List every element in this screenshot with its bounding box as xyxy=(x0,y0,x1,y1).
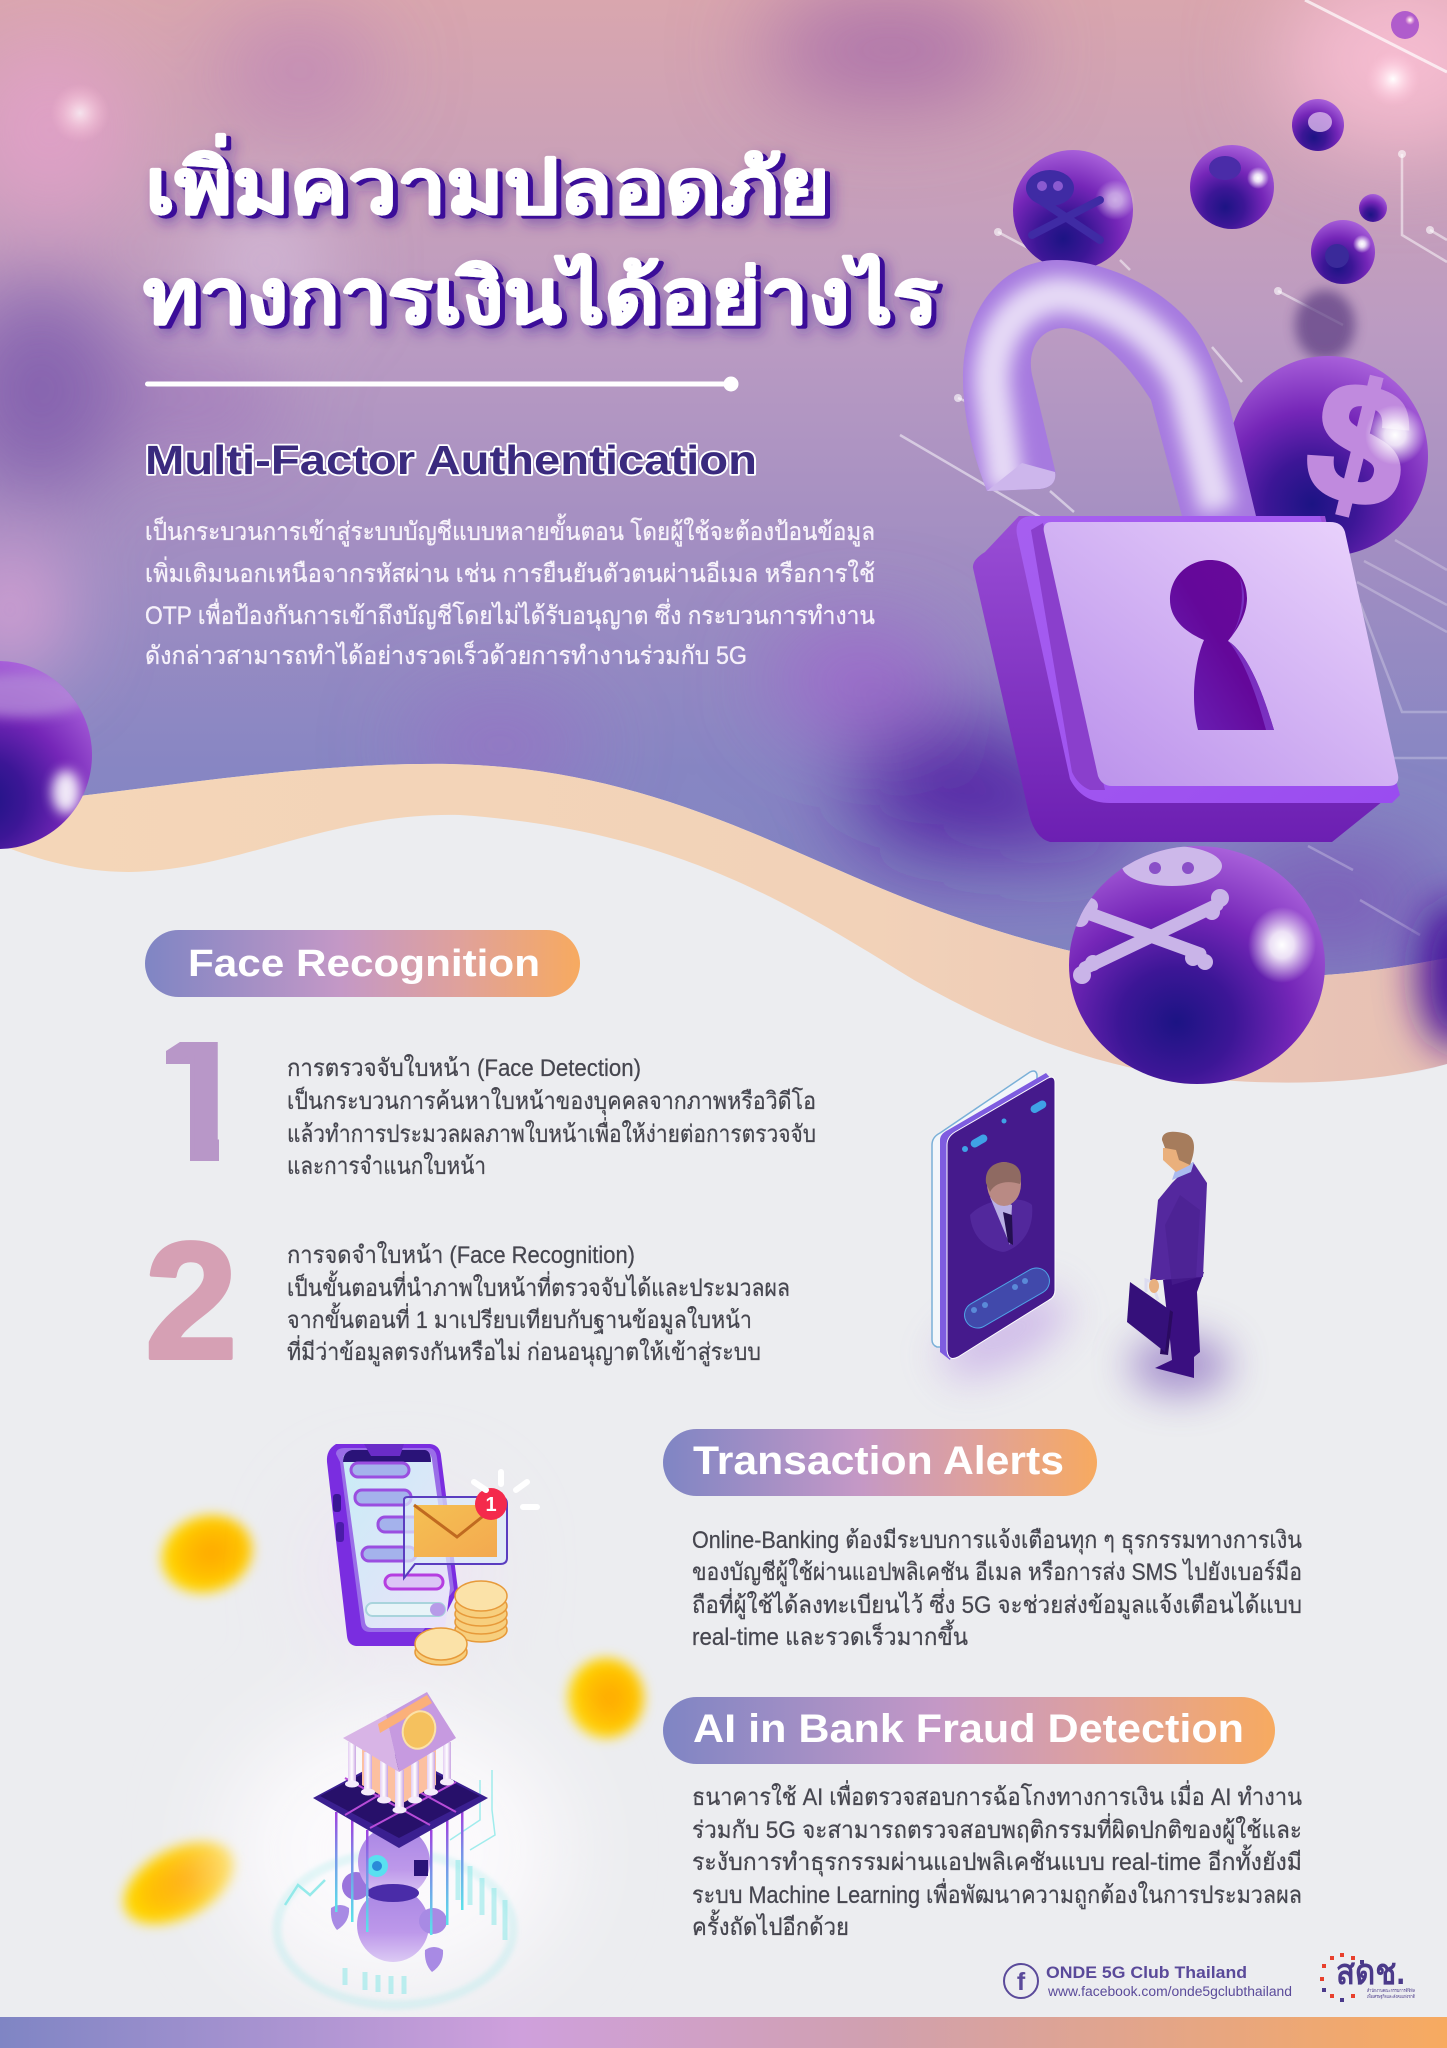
shadow of small sphere xyxy=(1295,290,1355,360)
step 2 text: จากขั้นตอนที่ 1 มาเปรียบเทียบกับฐานข้อมูลใบหน้า xyxy=(287,1302,752,1335)
step 1 text xyxy=(287,1054,816,1180)
footer bar xyxy=(0,2017,1447,2048)
illustration: AI robot and bank xyxy=(277,1692,513,2005)
small floating spheres xyxy=(1190,11,1419,284)
holographic ring xyxy=(277,1770,513,2005)
dollar sphere: $ xyxy=(1290,341,1428,549)
step 1 text: แล้วทำการประมวลผลภาพใบหน้าเพื่อให้ง่ายต่อการตรวจจับ xyxy=(287,1117,816,1148)
logo: เพื่อเศรษฐกิจและสังคมแห่งชาติ xyxy=(1367,1993,1415,2000)
AI fraud detection text: ครั้งถัดไปอีกด้วย xyxy=(692,1909,849,1941)
footer social text: ONDE 5G Club Thailand xyxy=(1046,1963,1247,1982)
intro paragraph: เพิ่มเติมนอกเหนือจากรหัสผ่าน เช่น การยืนยันตัวตนผ่านอีเมล หรือการใช้ xyxy=(145,556,875,588)
icon: facebook: f xyxy=(1017,1968,1026,1996)
AI fraud detection text: ระงับการทำธุรกรรมผ่านแอปพลิเคชันแบบ real-time อีกทั้งยังมี xyxy=(692,1844,1302,1877)
step 1 text: เป็นกระบวนการค้นหาใบหน้าของบุคคลจากภาพหรือวิดีโอ xyxy=(287,1086,816,1116)
padlock rim xyxy=(1017,516,1400,803)
AI fraud detection text: ร่วมกับ 5G จะสามารถตรวจสอบพฤติกรรมที่ผิดปกติของผู้ใช้และ xyxy=(692,1813,1302,1845)
skull sphere bottom xyxy=(1069,846,1325,1084)
AI fraud detection text xyxy=(692,1780,1302,1941)
padlock face plate xyxy=(1044,522,1398,786)
illustration: phone with notification and coins xyxy=(327,1444,537,1665)
step 2 text: การจดจำใบหน้า (Face Recognition) xyxy=(287,1241,635,1269)
circuit lines xyxy=(900,0,1447,935)
intro paragraph: ดังกล่าวสามารถทำได้อย่างรวดเร็วด้วยการทำงานร่วมกับ 5G xyxy=(145,640,747,670)
hero background with blurred colour blobs xyxy=(0,0,1447,1100)
cyan wires xyxy=(335,1812,464,1935)
intro paragraph: เป็นกระบวนการเข้าสู่ระบบบัญชีแบบหลายขั้นตอน โดยผู้ใช้จะต้องป้อนข้อมูล xyxy=(145,513,875,547)
subtitle: Multi-Factor Authentication xyxy=(145,437,757,483)
transaction alerts text xyxy=(692,1527,1302,1651)
intro paragraph: OTP เพื่อป้องกันการเข้าถึงบัญชีโดยไม่ได้รับอนุญาต ซึ่ง กระบวนการทำงาน xyxy=(145,598,875,631)
transaction alerts text: real-time และรวดเร็วมากขึ้น xyxy=(692,1619,968,1651)
step 2 text: ที่มีว่าข้อมูลตรงกันหรือไม่ ก่อนอนุญาตให้เข้าสู่ระบบ xyxy=(287,1335,761,1367)
circuit end dots xyxy=(50,51,1434,402)
blurred gold coin 2 xyxy=(568,1658,644,1738)
number 2: 2 xyxy=(145,1209,237,1394)
AI fraud detection pill: AI in Bank Fraud Detection xyxy=(693,1707,1244,1751)
divider xyxy=(145,376,738,392)
illustration: phone with notification and coins: 1 xyxy=(485,1494,497,1516)
face recognition pill: Face Recognition xyxy=(188,943,540,985)
left sphere xyxy=(0,661,92,849)
bank building xyxy=(343,1692,456,1814)
blurred gold coin 3 xyxy=(110,1825,248,1941)
padlock xyxy=(963,260,1400,842)
title: เพิ่มความปลอดภัย xyxy=(145,133,830,230)
padlock body xyxy=(973,516,1388,842)
AI fraud detection text: ธนาคารใช้ AI เพื่อตรวจสอบการฉ้อโกงทางการเงิน เมื่อ AI ทำงาน xyxy=(692,1780,1302,1811)
step 2 text xyxy=(287,1241,790,1367)
title: ทางการเงินได้อย่างไร xyxy=(143,253,938,340)
illustration: phone with face scan and businessman xyxy=(929,1071,1230,1395)
footer social text: www.facebook.com/onde5gclubthailand xyxy=(1047,1984,1292,1999)
footer social text xyxy=(1046,1963,1292,1999)
transaction alerts text: ของบัญชีผู้ใช้ผ่านแอปพลิเคชัน อีเมล หรือการส่ง SMS ไปยังเบอร์มือ xyxy=(692,1558,1302,1587)
dark blob on right edge xyxy=(1417,900,1447,1050)
face recognition pill xyxy=(145,930,580,997)
transaction alerts pill xyxy=(663,1429,1097,1496)
logo xyxy=(1320,1951,1415,2002)
logo: สดช. xyxy=(1336,1951,1405,1992)
transaction alerts text: Online-Banking ต้องมีระบบการแจ้งเตือนทุก ๆ ธุรกรรมทางการเงิน xyxy=(692,1527,1302,1555)
intro paragraph xyxy=(145,513,875,670)
AI fraud detection text: ระบบ Machine Learning เพื่อพัฒนาความถูกต้องในการประมวลผล xyxy=(692,1878,1302,1910)
keyhole xyxy=(1170,560,1274,730)
transaction alerts text: ถือที่ผู้ใช้ได้ลงทะเบียนไว้ ซึ่ง 5G จะช่วยส่งข้อมูลแจ้งเตือนได้แบบ xyxy=(692,1588,1302,1620)
circuit platform xyxy=(313,1752,488,1848)
logo: สำนักงานคณะกรรมการดิจิทัล xyxy=(1367,1987,1415,1993)
blurred gold coin 1 xyxy=(152,1504,262,1604)
padlock shackle xyxy=(963,260,1256,516)
step 1 text: การตรวจจับใบหน้า (Face Detection) xyxy=(287,1054,641,1082)
robot xyxy=(331,1826,447,1972)
number 1: 1 xyxy=(146,1010,242,1202)
transaction alerts pill: Transaction Alerts xyxy=(693,1439,1064,1483)
wave band xyxy=(0,764,1447,1083)
step 1 text: และการจำแนกใบหน้า xyxy=(287,1152,486,1180)
soft glow behind illustrations xyxy=(225,1500,565,1990)
title xyxy=(143,133,938,340)
dollar sphere xyxy=(1234,356,1428,554)
icon: facebook xyxy=(1004,1964,1038,1998)
skull sphere top xyxy=(1013,150,1135,270)
padlock inner edge xyxy=(1031,523,1105,790)
AI fraud detection pill xyxy=(663,1697,1275,1764)
step 2 text: เป็นขั้นตอนที่นำภาพใบหน้าที่ตรวจจับได้และประมวลผล xyxy=(287,1270,790,1302)
